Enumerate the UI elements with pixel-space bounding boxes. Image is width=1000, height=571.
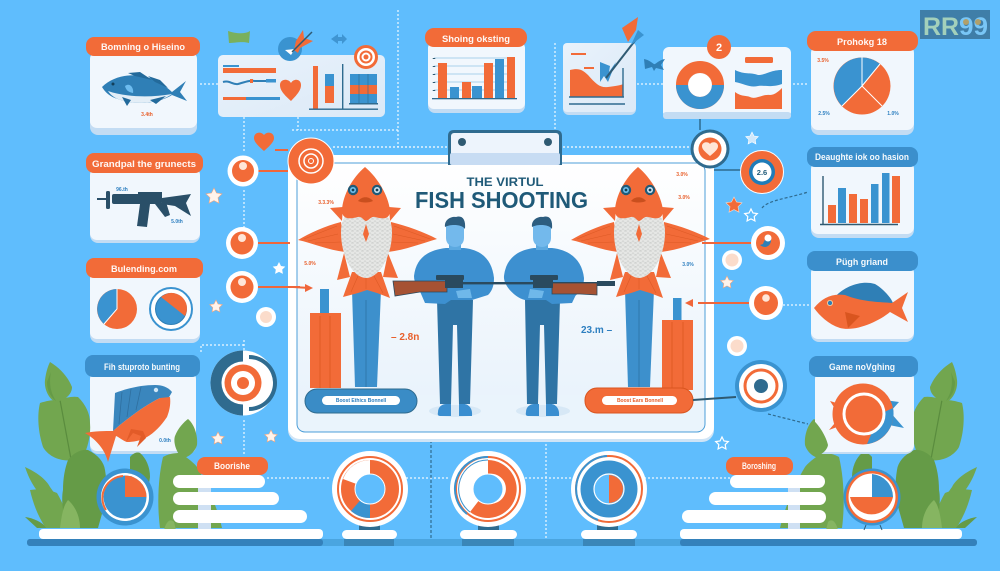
- header text: Bomning o Hiseino: [101, 42, 185, 53]
- card header: [85, 355, 200, 377]
- watermark: RR99: 99: [959, 13, 988, 41]
- list: right: [682, 457, 826, 529]
- list rows: [682, 475, 826, 523]
- plant right: [780, 362, 977, 530]
- label chip: [745, 57, 773, 63]
- heading text: Boorishe: [214, 461, 250, 472]
- small stars: [206, 132, 758, 449]
- title: FISH SHOOTING: [415, 187, 588, 213]
- plant leaf over card right: [807, 420, 828, 456]
- value labels left: [304, 200, 419, 343]
- disc left small: [96, 468, 154, 526]
- panel: bar chart card: [425, 28, 527, 113]
- panel: pie card: [86, 258, 203, 343]
- panel: bottom left fish card: [85, 355, 200, 454]
- value labels left: 3.3.3%: [318, 200, 334, 206]
- platform left: [39, 529, 323, 539]
- connector lines: [200, 10, 815, 540]
- fish character left: [298, 167, 437, 387]
- button left: Boost Ethics Bonnell: [336, 398, 387, 404]
- target: orange disc: [740, 150, 784, 194]
- target: orange top left: [288, 138, 334, 184]
- panel: fish card right: [807, 251, 918, 342]
- icon: orange blue fish: [85, 385, 172, 462]
- header text: Shoing oksting: [442, 34, 510, 45]
- donut chart right: [571, 451, 647, 527]
- target: heart: [690, 130, 730, 168]
- platform band: [27, 539, 977, 546]
- main board: [288, 130, 714, 442]
- pale dot left: [256, 307, 276, 327]
- list: left: [173, 457, 307, 529]
- button right: Boost Ears Bonnell: [617, 398, 664, 404]
- bar chart: [820, 173, 900, 225]
- platform right: [680, 529, 962, 539]
- target: orange disc: 2.6: [757, 168, 767, 177]
- pale dot right top: [722, 250, 742, 270]
- header text: Bulending.com: [111, 264, 177, 275]
- icon: dart pie: [278, 30, 313, 61]
- bar chart: [432, 57, 517, 99]
- panel: game card right: [809, 356, 918, 454]
- card header: [807, 251, 918, 271]
- header text: Prohokg 18: [837, 37, 887, 48]
- floor: [298, 395, 704, 431]
- icon: blue fish: [102, 72, 187, 106]
- small labels: [571, 54, 594, 68]
- watermark: RR99: [920, 10, 990, 41]
- header text: Fih stuproto bunting: [104, 362, 180, 373]
- icon: heart: [280, 80, 301, 101]
- header text: Grandpal the grunects: [92, 159, 196, 170]
- axis: [569, 68, 625, 104]
- marker: left 2: [226, 227, 258, 259]
- pedestal left: [342, 524, 397, 546]
- panel: gun card: 5.0th: [171, 219, 183, 225]
- value labels: 96.th: [116, 187, 128, 193]
- header text: Game noVghing: [829, 362, 895, 373]
- value labels right: 3.0%: [682, 262, 694, 268]
- card header: [807, 147, 918, 167]
- target: large left: [210, 350, 277, 416]
- header text: Deaughte iok oo hasion: [815, 152, 909, 163]
- card header: [86, 153, 203, 173]
- disc right small: [844, 468, 900, 530]
- value labels right: [581, 172, 694, 336]
- icon: dart arrow: [600, 17, 644, 82]
- button left: [305, 389, 417, 413]
- pie chart: [97, 289, 137, 329]
- panel: area chart with arrow: [563, 17, 644, 115]
- arrows into board: [305, 284, 693, 307]
- title: THE VIRTUL: [466, 175, 544, 189]
- panel: bar chart card right: [807, 147, 918, 238]
- panel: pie card right: 1.0%: [887, 111, 899, 117]
- badge: 2: [716, 42, 722, 54]
- panel: metrics dashboard top left: [218, 55, 385, 117]
- panel: donut and wave chart: [663, 35, 791, 119]
- button right: [585, 388, 693, 413]
- value labels right: 3.0%: [678, 195, 690, 201]
- icon: round fish emblem: [829, 384, 904, 444]
- person left: [414, 216, 494, 417]
- card header: [807, 31, 918, 51]
- value labels right: 3.0%: [676, 172, 688, 178]
- pedestal right: [581, 524, 637, 546]
- marker: left 1: [228, 156, 258, 186]
- card header: [86, 37, 200, 56]
- pie chart: [834, 58, 890, 114]
- marker: left 3: [226, 271, 258, 303]
- icon: green ribbon: [228, 31, 250, 43]
- panel: pie card right: [807, 31, 918, 135]
- wave chart: [735, 70, 782, 109]
- header text: Pügh griand: [836, 257, 888, 268]
- heading text: Boroshing: [742, 461, 776, 472]
- marker: right 2: [749, 286, 783, 320]
- card header: [425, 28, 527, 47]
- marker: right 1: [751, 226, 785, 260]
- icon: heart small: [254, 133, 274, 151]
- value label: 0.0th: [159, 438, 171, 444]
- card header: [809, 356, 918, 377]
- panel: gun card: [86, 153, 203, 243]
- clip: [448, 130, 562, 165]
- watermark: RR99: RR: [923, 13, 959, 41]
- list heading: [197, 457, 268, 475]
- icon: rifle: [97, 191, 191, 227]
- icon: target: [354, 45, 378, 69]
- list heading: [726, 457, 793, 475]
- card header: [86, 258, 203, 278]
- donut chart left: [332, 451, 408, 527]
- line from button to target right: [693, 397, 736, 400]
- value labels right: 23.m –: [581, 325, 613, 336]
- target: right large: [735, 360, 787, 412]
- ring chart: [150, 288, 192, 330]
- pedestal middle: [460, 524, 517, 546]
- fish character right: [571, 167, 710, 387]
- value labels: 3.5%: [817, 58, 829, 64]
- icon: blue bow mark: [644, 59, 665, 71]
- rifles: [393, 275, 615, 296]
- donut chart middle: [450, 451, 526, 527]
- value label: 3.4th: [141, 112, 153, 118]
- panel: pie card right: 2.5%: [818, 111, 830, 117]
- icon: orange fish: [814, 283, 908, 329]
- marker lines: [257, 150, 752, 303]
- bar left: [310, 289, 341, 388]
- bar right: [662, 298, 693, 390]
- donut chart: [676, 67, 724, 109]
- icon: blue fish mark: [331, 34, 347, 44]
- area chart: [570, 69, 623, 97]
- bar chart: [309, 64, 378, 110]
- person right: [504, 216, 584, 417]
- list rows: [173, 475, 307, 523]
- pale dot right bottom: [727, 336, 747, 356]
- sparkline bars: [223, 65, 280, 100]
- value labels left: – 2.8n: [391, 332, 419, 343]
- value labels left: 5.0%: [304, 261, 316, 267]
- panel: fish card top left: [86, 37, 200, 135]
- title: [415, 175, 588, 213]
- plant left: [25, 362, 222, 530]
